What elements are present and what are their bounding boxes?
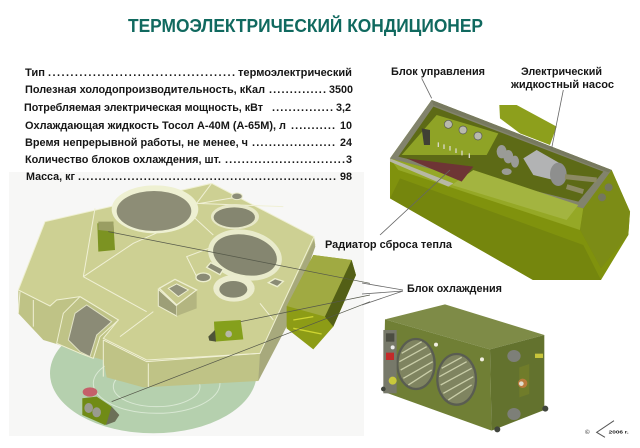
label: heat radiator: Радиатор сброса тепла (325, 239, 453, 251)
specification table (24, 67, 353, 183)
electric pump (523, 150, 567, 186)
turret illustration (18, 183, 370, 433)
spec: operating time: .................... (252, 137, 335, 149)
small ports (196, 263, 283, 287)
panel seam lines (18, 183, 283, 387)
copyright logo (585, 421, 614, 437)
label: control unit: Блок управления (391, 66, 485, 78)
spec: operating time: Время непрерывной работы, не менее, ч (25, 137, 248, 149)
spec: power: Потребляемая электрическая мощность, кВт (24, 102, 264, 114)
turret body (18, 183, 315, 387)
lower tray (452, 170, 578, 220)
interior green shelf (402, 115, 498, 155)
lower cooling unit (82, 387, 119, 425)
sight block (158, 279, 197, 316)
cooling unit illustration (381, 304, 629, 437)
label: electric pump: жидкостный насос (510, 79, 614, 91)
spec: power: ............... (272, 102, 333, 114)
spec: coolant: ........... (291, 120, 335, 132)
arrows to cooling unit label (362, 283, 403, 305)
label: electric pump: Электрический (521, 66, 602, 78)
fan grille left (397, 339, 435, 389)
cooling unit centre (208, 320, 243, 342)
spec: operating time: 24 (340, 137, 353, 149)
pipe fittings (507, 350, 521, 420)
spec: type: Тип (25, 67, 45, 79)
barrel recess (57, 297, 118, 358)
feet (381, 387, 548, 432)
round port (213, 275, 255, 302)
side face (490, 335, 544, 431)
top face (385, 304, 544, 349)
unit body (390, 100, 630, 280)
label: electric pump (510, 66, 614, 91)
indicator lamps (434, 343, 484, 361)
lower front shade (390, 178, 601, 280)
copyright year: 2006 г. (609, 429, 629, 434)
top flange (390, 158, 583, 230)
interior cavity (398, 107, 603, 202)
second large hatch (203, 223, 287, 287)
spec: cooling units: 3 (346, 154, 352, 166)
spec: cooling capacity: .............. (269, 84, 326, 96)
turret top surface (18, 183, 314, 360)
turret right side (258, 240, 315, 381)
floor ring markings (93, 353, 220, 413)
spec: type: термоэлектрический (238, 67, 352, 79)
spec: mass: 98 (340, 171, 352, 183)
spec: cooling capacity: 3500 (329, 84, 353, 96)
large hatch (112, 185, 198, 233)
spec: cooling units: ............................. (225, 154, 345, 166)
rim top bar (432, 100, 612, 172)
spec: mass: ............................................................... (78, 171, 336, 183)
connector (422, 128, 430, 145)
spec: coolant: Охлаждающая жидкость Тосол А-40М (А-65М), л (25, 120, 286, 132)
open lid rim (390, 100, 612, 208)
small hatch (211, 204, 259, 229)
right end panel (580, 170, 630, 268)
heat radiator plate (407, 158, 473, 182)
copyright logo: © (585, 428, 590, 436)
rear radiator box (287, 255, 356, 349)
spec: operating time (25, 137, 353, 149)
cooling unit on turret top (97, 222, 115, 252)
spec: type: .......................................... (48, 67, 235, 79)
radiator fins (497, 145, 519, 175)
spec: power: 3,2 (336, 102, 351, 114)
end fittings (598, 183, 613, 201)
pump pipes (565, 177, 597, 192)
title: ТЕРМОЭЛЕКТРИЧЕСКИЙ КОНДИЦИОНЕР (128, 15, 483, 36)
side connector (518, 364, 529, 397)
background panel (9, 172, 364, 436)
leader lines (380, 78, 563, 235)
spec: coolant: 10 (340, 120, 352, 132)
floor disc (50, 313, 257, 433)
label: cooling unit: Блок охлаждения (407, 283, 502, 295)
spec: type (25, 67, 352, 79)
spec: cooling units: Количество блоков охлаждения, шт. (25, 154, 221, 166)
spec: cooling capacity: Полезная холодопроизводительность, кКал (25, 84, 265, 96)
front face (383, 319, 492, 431)
fan grille right (437, 354, 476, 405)
mounting bracket (499, 105, 557, 145)
connector strip (383, 330, 397, 393)
leader lines (108, 232, 370, 402)
spec: cooling units (25, 154, 352, 166)
periscope (232, 193, 242, 200)
terminal row (438, 142, 469, 158)
rim lower bar (390, 158, 453, 187)
spec: mass: Масса, кг (26, 171, 75, 183)
air conditioner cutaway illustration (380, 78, 630, 280)
switches (444, 120, 482, 140)
yellow fitting (535, 354, 543, 358)
